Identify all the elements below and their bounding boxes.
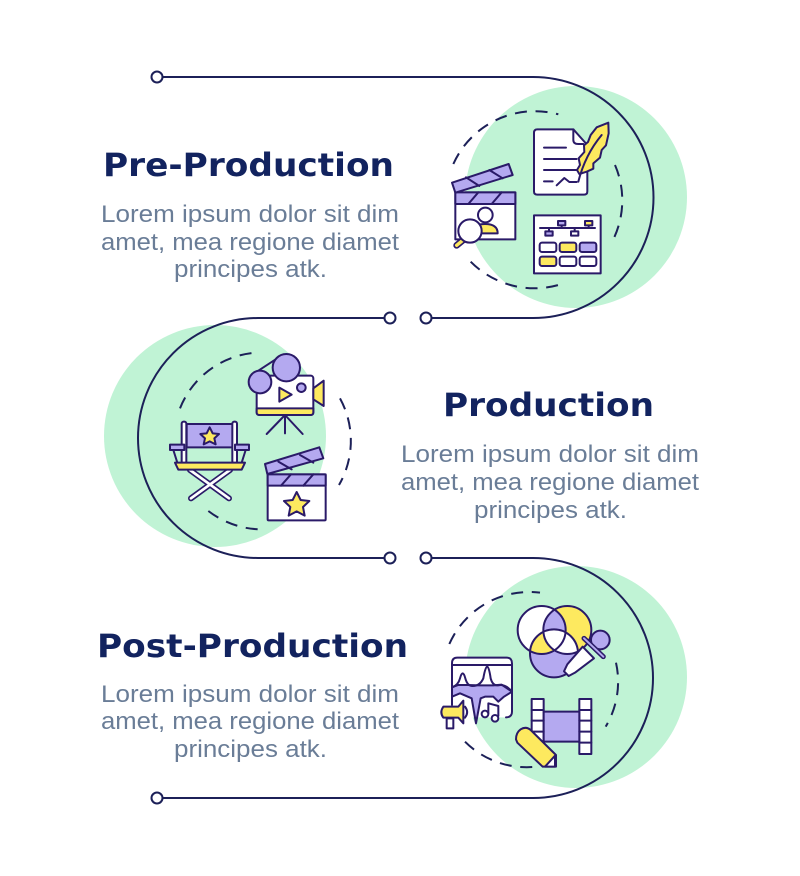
- body text: principes atk.: [174, 736, 327, 763]
- heading: Pre-Production: [103, 146, 394, 184]
- icon: megaphone: [441, 701, 467, 728]
- green circle: [465, 86, 687, 308]
- green circle: [465, 566, 687, 788]
- connector top dot: [384, 312, 396, 324]
- icons: production: [170, 353, 351, 529]
- icon: colour venn: [518, 606, 591, 677]
- icon: quill feather: [577, 123, 609, 182]
- dashed ring: [180, 353, 351, 529]
- icon: schedule board: [534, 215, 601, 273]
- icon: colour dropper: [564, 631, 610, 676]
- icon: clapperboard with star: [265, 447, 326, 520]
- connector start dot: [420, 552, 432, 564]
- heading: Post-Production: [97, 627, 408, 665]
- dashed ring: [449, 592, 618, 767]
- icon: film strip: [532, 699, 591, 754]
- connector end dot: [420, 312, 432, 324]
- icon: movie camera: [249, 354, 324, 434]
- body text: amet, mea regione diamet: [101, 229, 399, 256]
- body text: [101, 201, 399, 283]
- body text: Lorem ipsum dolor sit dim: [401, 441, 699, 468]
- connector start dot: [152, 72, 162, 82]
- icon: director chair: [170, 422, 249, 498]
- connector bottom dot: [384, 552, 396, 564]
- icon: script document: [534, 129, 587, 195]
- body text: amet, mea regione diamet: [101, 708, 399, 735]
- body text: Lorem ipsum dolor sit dim: [101, 201, 399, 228]
- icon: music notes: [482, 703, 498, 722]
- panel: post-production: [97, 552, 687, 804]
- panel: production: [104, 312, 699, 564]
- icon: clapperboard with person: [452, 164, 515, 245]
- body text: Lorem ipsum dolor sit dim: [101, 681, 399, 708]
- body text: [401, 441, 699, 524]
- icon: audio waveform panel: [452, 658, 512, 723]
- connector end dot: [152, 792, 162, 804]
- dashed ring: [453, 111, 622, 288]
- heading: Production: [443, 386, 654, 424]
- icons: pre-production: [452, 111, 622, 288]
- body text: amet, mea regione diamet: [401, 469, 699, 496]
- green circle: [104, 325, 326, 547]
- icon: pencil: [516, 728, 556, 767]
- body text: [101, 681, 399, 763]
- body text: principes atk.: [474, 497, 627, 524]
- panel: pre-production: [101, 72, 687, 324]
- body text: principes atk.: [174, 256, 327, 283]
- connector line: [138, 318, 384, 558]
- connector line: [163, 77, 654, 318]
- connector line: [163, 558, 653, 798]
- icons: post-production: [441, 592, 618, 767]
